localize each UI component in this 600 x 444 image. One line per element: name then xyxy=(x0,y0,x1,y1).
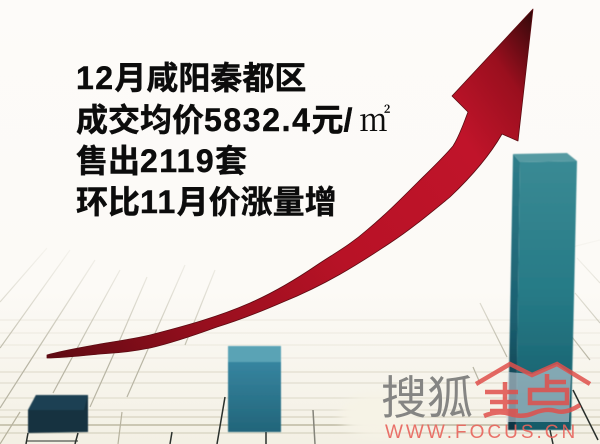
line 3: 售出2119套 xyxy=(76,143,247,179)
bar 3: tall teal bar xyxy=(508,153,577,430)
watermark: Sohu name: 搜狐 xyxy=(381,372,473,424)
smudge: retouched white patch beside the middle bar xyxy=(340,393,420,437)
line 2: 成交均价5832.4元/㎡ xyxy=(76,95,390,140)
bar 2: medium teal bar xyxy=(228,346,281,432)
icon: house logo xyxy=(476,364,590,422)
headline text block xyxy=(76,60,390,220)
watermark xyxy=(381,364,590,443)
watermark: site url: WWW.FOCUS.CN xyxy=(385,422,578,443)
rising red arrow xyxy=(47,9,533,358)
line 4: 环比11月价涨量增 xyxy=(76,184,337,220)
bar 1: small dark bar xyxy=(28,395,88,433)
line 1: 12月咸阳秦都区 xyxy=(76,60,306,96)
